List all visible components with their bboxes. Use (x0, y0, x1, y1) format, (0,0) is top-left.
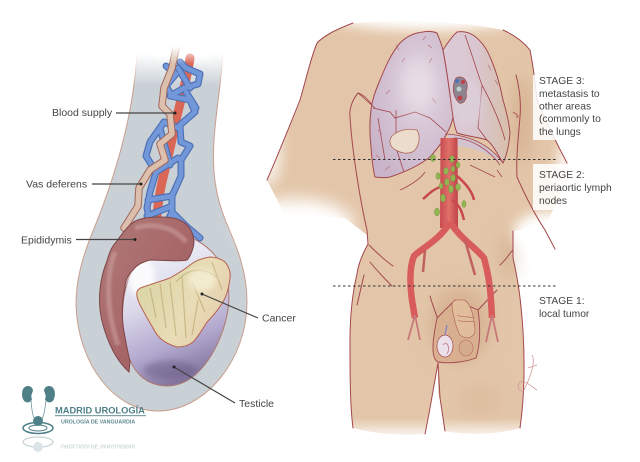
panel: testicular cancer anatomy (21, 42, 296, 411)
label: cancer (200, 292, 296, 324)
vas deferens outline (124, 48, 176, 228)
cancer highlight (188, 269, 216, 291)
stage 3 label: the lungs (539, 127, 581, 138)
logo title: MADRID UROLOGÍA (55, 406, 145, 416)
lung texture (402, 59, 434, 111)
veins dark outline (136, 62, 200, 238)
stage 1 label: local tumor (539, 309, 590, 320)
aorta and iliac arteries (408, 138, 498, 342)
epididymis texture (109, 226, 186, 345)
stage 2 label: periaortic lymph (539, 183, 612, 194)
logo: Madrid Urología (22, 386, 146, 452)
panel: cancer stages on body (237, 2, 615, 440)
lymph nodes (430, 154, 466, 216)
label: vas deferens: Vas deferens (26, 178, 87, 190)
body silhouette (267, 21, 575, 435)
icon: kidneys and bladder (22, 386, 55, 452)
stage 3 label: metastasis to (539, 89, 600, 100)
stage 3 label (533, 75, 604, 140)
logo divider (55, 415, 146, 416)
body edge fades (237, 2, 584, 440)
label: epididymis (21, 234, 136, 246)
epididymis (100, 217, 194, 372)
vas deferens (124, 48, 176, 228)
veins (136, 62, 200, 238)
stage 2 label: STAGE 2: (539, 170, 585, 181)
cancer texture (150, 262, 222, 338)
diaphragm arch (448, 134, 503, 163)
right lung (443, 32, 510, 163)
hilum vessels (453, 77, 467, 103)
cord top fade (155, 42, 210, 64)
stage 3 label: STAGE 3: (539, 76, 585, 87)
label: testicle: Testicle (239, 398, 274, 410)
label: testicle (172, 366, 274, 410)
logo tagline: UROLOGÍA DE VANGUARDIA (61, 418, 135, 426)
testicle (122, 239, 229, 386)
label: blood supply (52, 107, 176, 119)
stage divider lines (333, 160, 556, 286)
testicle highlight (129, 258, 155, 298)
scrotum and penis (433, 300, 480, 363)
top fade of scrotum (125, 46, 235, 86)
spermatic cord vessels (124, 48, 200, 238)
label: cancer: Cancer (262, 312, 296, 324)
lung specks (376, 36, 498, 170)
stage 2 label (533, 164, 615, 210)
stage 2 label: nodes (539, 196, 567, 207)
artery (156, 58, 190, 225)
artist signature (518, 355, 537, 391)
label: vas deferens (26, 178, 142, 190)
label: epididymis: Epididymis (21, 234, 72, 246)
scrotum silhouette (76, 52, 247, 411)
cancer mass (137, 257, 230, 347)
left lung (370, 31, 453, 178)
testicle shadow (144, 361, 196, 379)
label: blood supply: Blood supply (52, 107, 113, 119)
stage 1 label: STAGE 1: (539, 296, 585, 307)
body shading (430, 75, 532, 418)
lung metastasis tumour (390, 129, 419, 153)
mediastinum (454, 79, 482, 127)
lung fissure lines (358, 35, 518, 190)
logo reflection: UROLOGÍA DE VANGUARDIA (61, 442, 135, 450)
body outline (267, 23, 567, 434)
stage 3 label: (commonly to (539, 114, 601, 125)
stage 3 label: other areas (539, 102, 591, 112)
